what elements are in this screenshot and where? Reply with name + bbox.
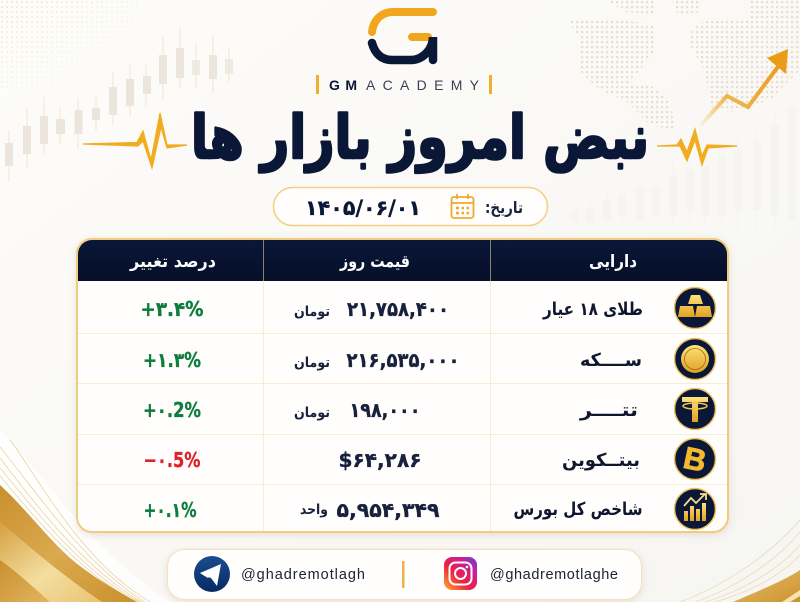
- instagram handle: @ghadremotlaghe: [490, 567, 618, 583]
- logo: GM Academy: [316, 12, 492, 94]
- divider: [402, 561, 404, 588]
- rising arrow: [700, 49, 788, 126]
- row: coin: تومان: [294, 355, 330, 371]
- row: stock index: شاخص کل بورس: [514, 499, 642, 520]
- icon: chart: [674, 488, 716, 530]
- row: tether: [143, 388, 716, 430]
- social footer pill: [168, 550, 642, 600]
- row: stock index: واحد: [300, 502, 328, 518]
- heartbeat pulse left: [83, 113, 187, 168]
- logo wordmark: [316, 75, 492, 94]
- row: tether: تومان: [294, 405, 330, 421]
- row: tether: +۰.2%: [143, 398, 201, 422]
- background: faint candlestick chart left: [5, 27, 233, 182]
- row: gold: تومان: [294, 304, 330, 320]
- row: gold: +۳.۴%: [140, 297, 204, 321]
- header: price: قیمت روز: [339, 252, 410, 272]
- row: coin: +۱.۳%: [143, 348, 201, 372]
- header: asset: دارایی: [589, 252, 637, 272]
- row: stock index: +۰.۱%: [144, 498, 196, 522]
- row: bitcoin: −۰.5%: [144, 448, 200, 472]
- row: coin: ســــکه: [580, 350, 642, 371]
- price table: [77, 239, 728, 532]
- table header: [78, 240, 727, 281]
- background: dotted texture top left: [0, 0, 140, 90]
- row: bitcoin: بیتــکوین: [562, 450, 640, 471]
- decorative gold wave bottom left: [0, 430, 170, 602]
- row: stock index: ۵,۹۵۴,۳۴۹: [336, 498, 440, 522]
- logo wordmark: GM: [329, 77, 357, 93]
- telegram handle: @ghadremotlagh: [241, 567, 365, 583]
- icon: bitcoin: B: [680, 440, 709, 479]
- date label: تاریخ:: [485, 198, 523, 217]
- icon: tether: [674, 388, 716, 430]
- icon: gold bars: [674, 288, 716, 328]
- decorative gold wave bottom right: [680, 520, 800, 602]
- row: coin: ۲۱۶,۵۳۵,۰۰۰: [346, 348, 460, 372]
- row: bitcoin: [144, 438, 716, 480]
- icon: telegram: [194, 556, 230, 592]
- icon: coin: [674, 338, 716, 380]
- logo wordmark: ACADEMY: [366, 77, 480, 93]
- header: change: درصد تغییر: [129, 252, 216, 272]
- icon: instagram: [444, 557, 477, 590]
- background: dotted world map right: [568, 0, 800, 130]
- row: tether: ۱۹۸,۰۰۰: [350, 398, 420, 422]
- row: gold: [140, 288, 716, 328]
- icon: bitcoin: [674, 438, 716, 480]
- title: نبض امروز بازار ها: [191, 103, 649, 173]
- row: tether: تتــــر: [579, 400, 638, 421]
- logo mark: [372, 12, 433, 60]
- date pill: [274, 188, 548, 226]
- row: gold: ۲۱,۷۵۸,۴۰۰: [347, 297, 449, 321]
- background: faint candlesticks right: [571, 105, 796, 235]
- date value: ۱۴۰۵/۰۶/۰۱: [305, 196, 421, 220]
- icon: calendar: [452, 194, 474, 218]
- heartbeat pulse right: [657, 129, 737, 165]
- row: gold: طلای ۱۸ عیار: [542, 299, 643, 320]
- row: bitcoin: $۶۴,۲۸۶: [338, 448, 422, 472]
- row: stock index: [144, 488, 716, 530]
- row: coin: [143, 338, 716, 380]
